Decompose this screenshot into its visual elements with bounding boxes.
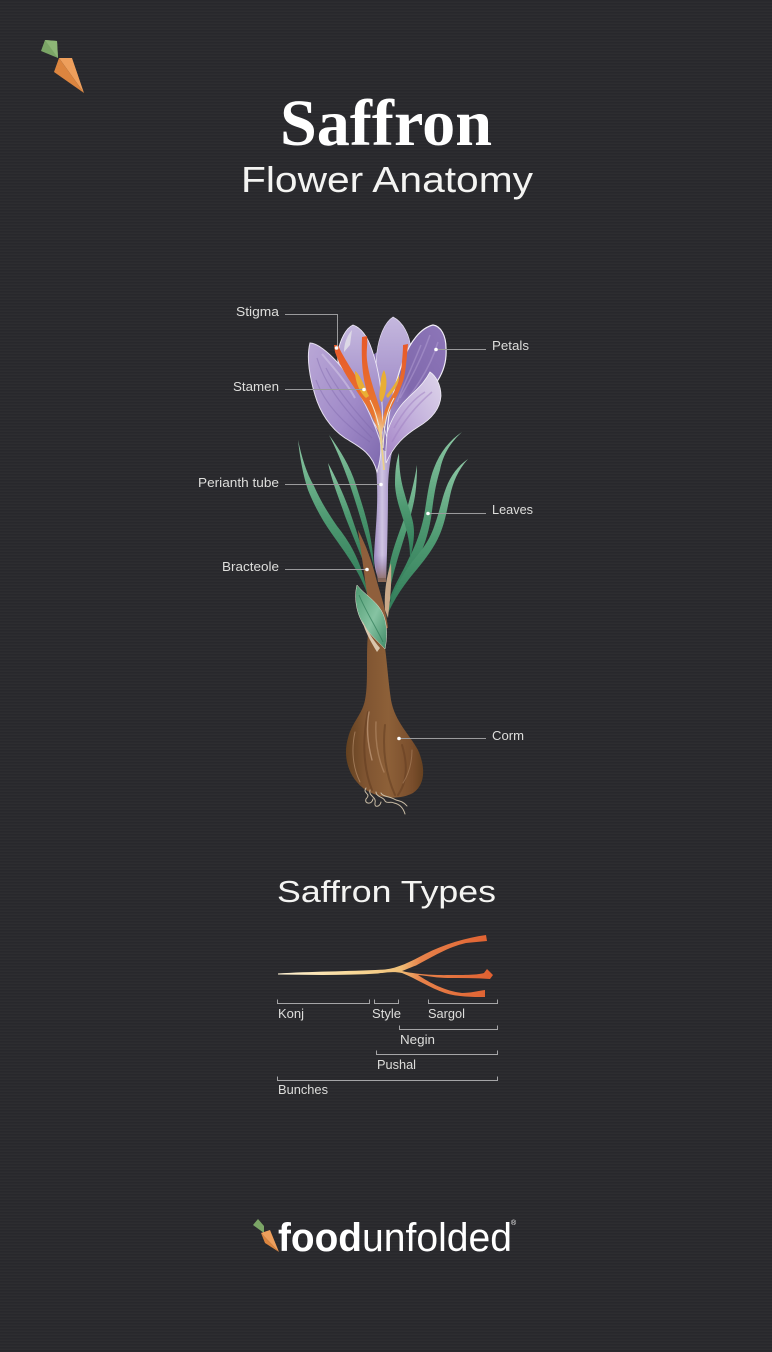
bracket: Pushal bbox=[376, 1050, 498, 1072]
registered mark: ® bbox=[511, 1219, 517, 1227]
bracket: Bunches bbox=[278, 1076, 498, 1097]
subtitle: Flower Anatomy bbox=[241, 159, 533, 200]
illustration: saffron thread bbox=[278, 935, 493, 997]
icon: carrot logo top left bbox=[41, 40, 84, 93]
label: Leaves: Leaves bbox=[492, 502, 533, 517]
label: Petals bbox=[434, 338, 530, 353]
label: Perianth tube: Perianth tube bbox=[198, 475, 279, 490]
front left petal bbox=[308, 343, 381, 472]
label: Bracteole: Bracteole bbox=[222, 559, 279, 574]
footer logo: foodunfolded bbox=[253, 1216, 517, 1260]
bracket: Sargol bbox=[428, 1000, 498, 1021]
label: Leaves bbox=[426, 502, 533, 517]
bracket: Bunches: Bunches bbox=[278, 1082, 328, 1097]
label: Corm: Corm bbox=[492, 728, 524, 743]
back right petal bbox=[387, 325, 446, 435]
logo wordmark: food bbox=[278, 1216, 362, 1260]
flower centre fill bbox=[345, 350, 425, 450]
back center petal bbox=[376, 317, 411, 438]
label: Stamen: Stamen bbox=[233, 379, 279, 394]
label: Bracteole bbox=[222, 559, 369, 574]
brown sheath bracteole bbox=[358, 530, 388, 632]
bracket: Negin: Negin bbox=[400, 1032, 435, 1047]
bracket: Konj: Konj bbox=[278, 1006, 304, 1021]
back left petal bbox=[338, 325, 382, 436]
logo wordmark: unfolded bbox=[362, 1216, 512, 1260]
bracket: Style: Style bbox=[372, 1006, 401, 1021]
bracket: Negin bbox=[400, 1026, 498, 1047]
bracket: Sargol: Sargol bbox=[428, 1006, 465, 1021]
heading: Saffron Types: Saffron Types bbox=[277, 874, 496, 909]
label: Petals: Petals bbox=[492, 338, 530, 353]
green bract bbox=[356, 585, 387, 649]
icon: logo carrot bbox=[253, 1219, 279, 1252]
title: Saffron bbox=[280, 87, 492, 160]
label: Perianth tube bbox=[198, 475, 383, 490]
bracket: Konj bbox=[278, 1000, 370, 1021]
front right petal bbox=[386, 372, 441, 463]
roots bbox=[365, 788, 407, 814]
label: Stigma: Stigma bbox=[236, 304, 280, 319]
bracket: Pushal: Pushal bbox=[377, 1057, 416, 1072]
illustration: saffron flower bbox=[298, 317, 468, 814]
label: Stigma bbox=[236, 304, 338, 350]
leaves bbox=[298, 432, 468, 618]
perianth tube bbox=[370, 447, 392, 578]
corm neck and bulb bbox=[346, 620, 423, 798]
bracket: Style bbox=[372, 1000, 401, 1021]
label: Stamen bbox=[233, 379, 366, 394]
label: Corm bbox=[397, 728, 524, 743]
stamens and stigma bbox=[334, 336, 408, 470]
